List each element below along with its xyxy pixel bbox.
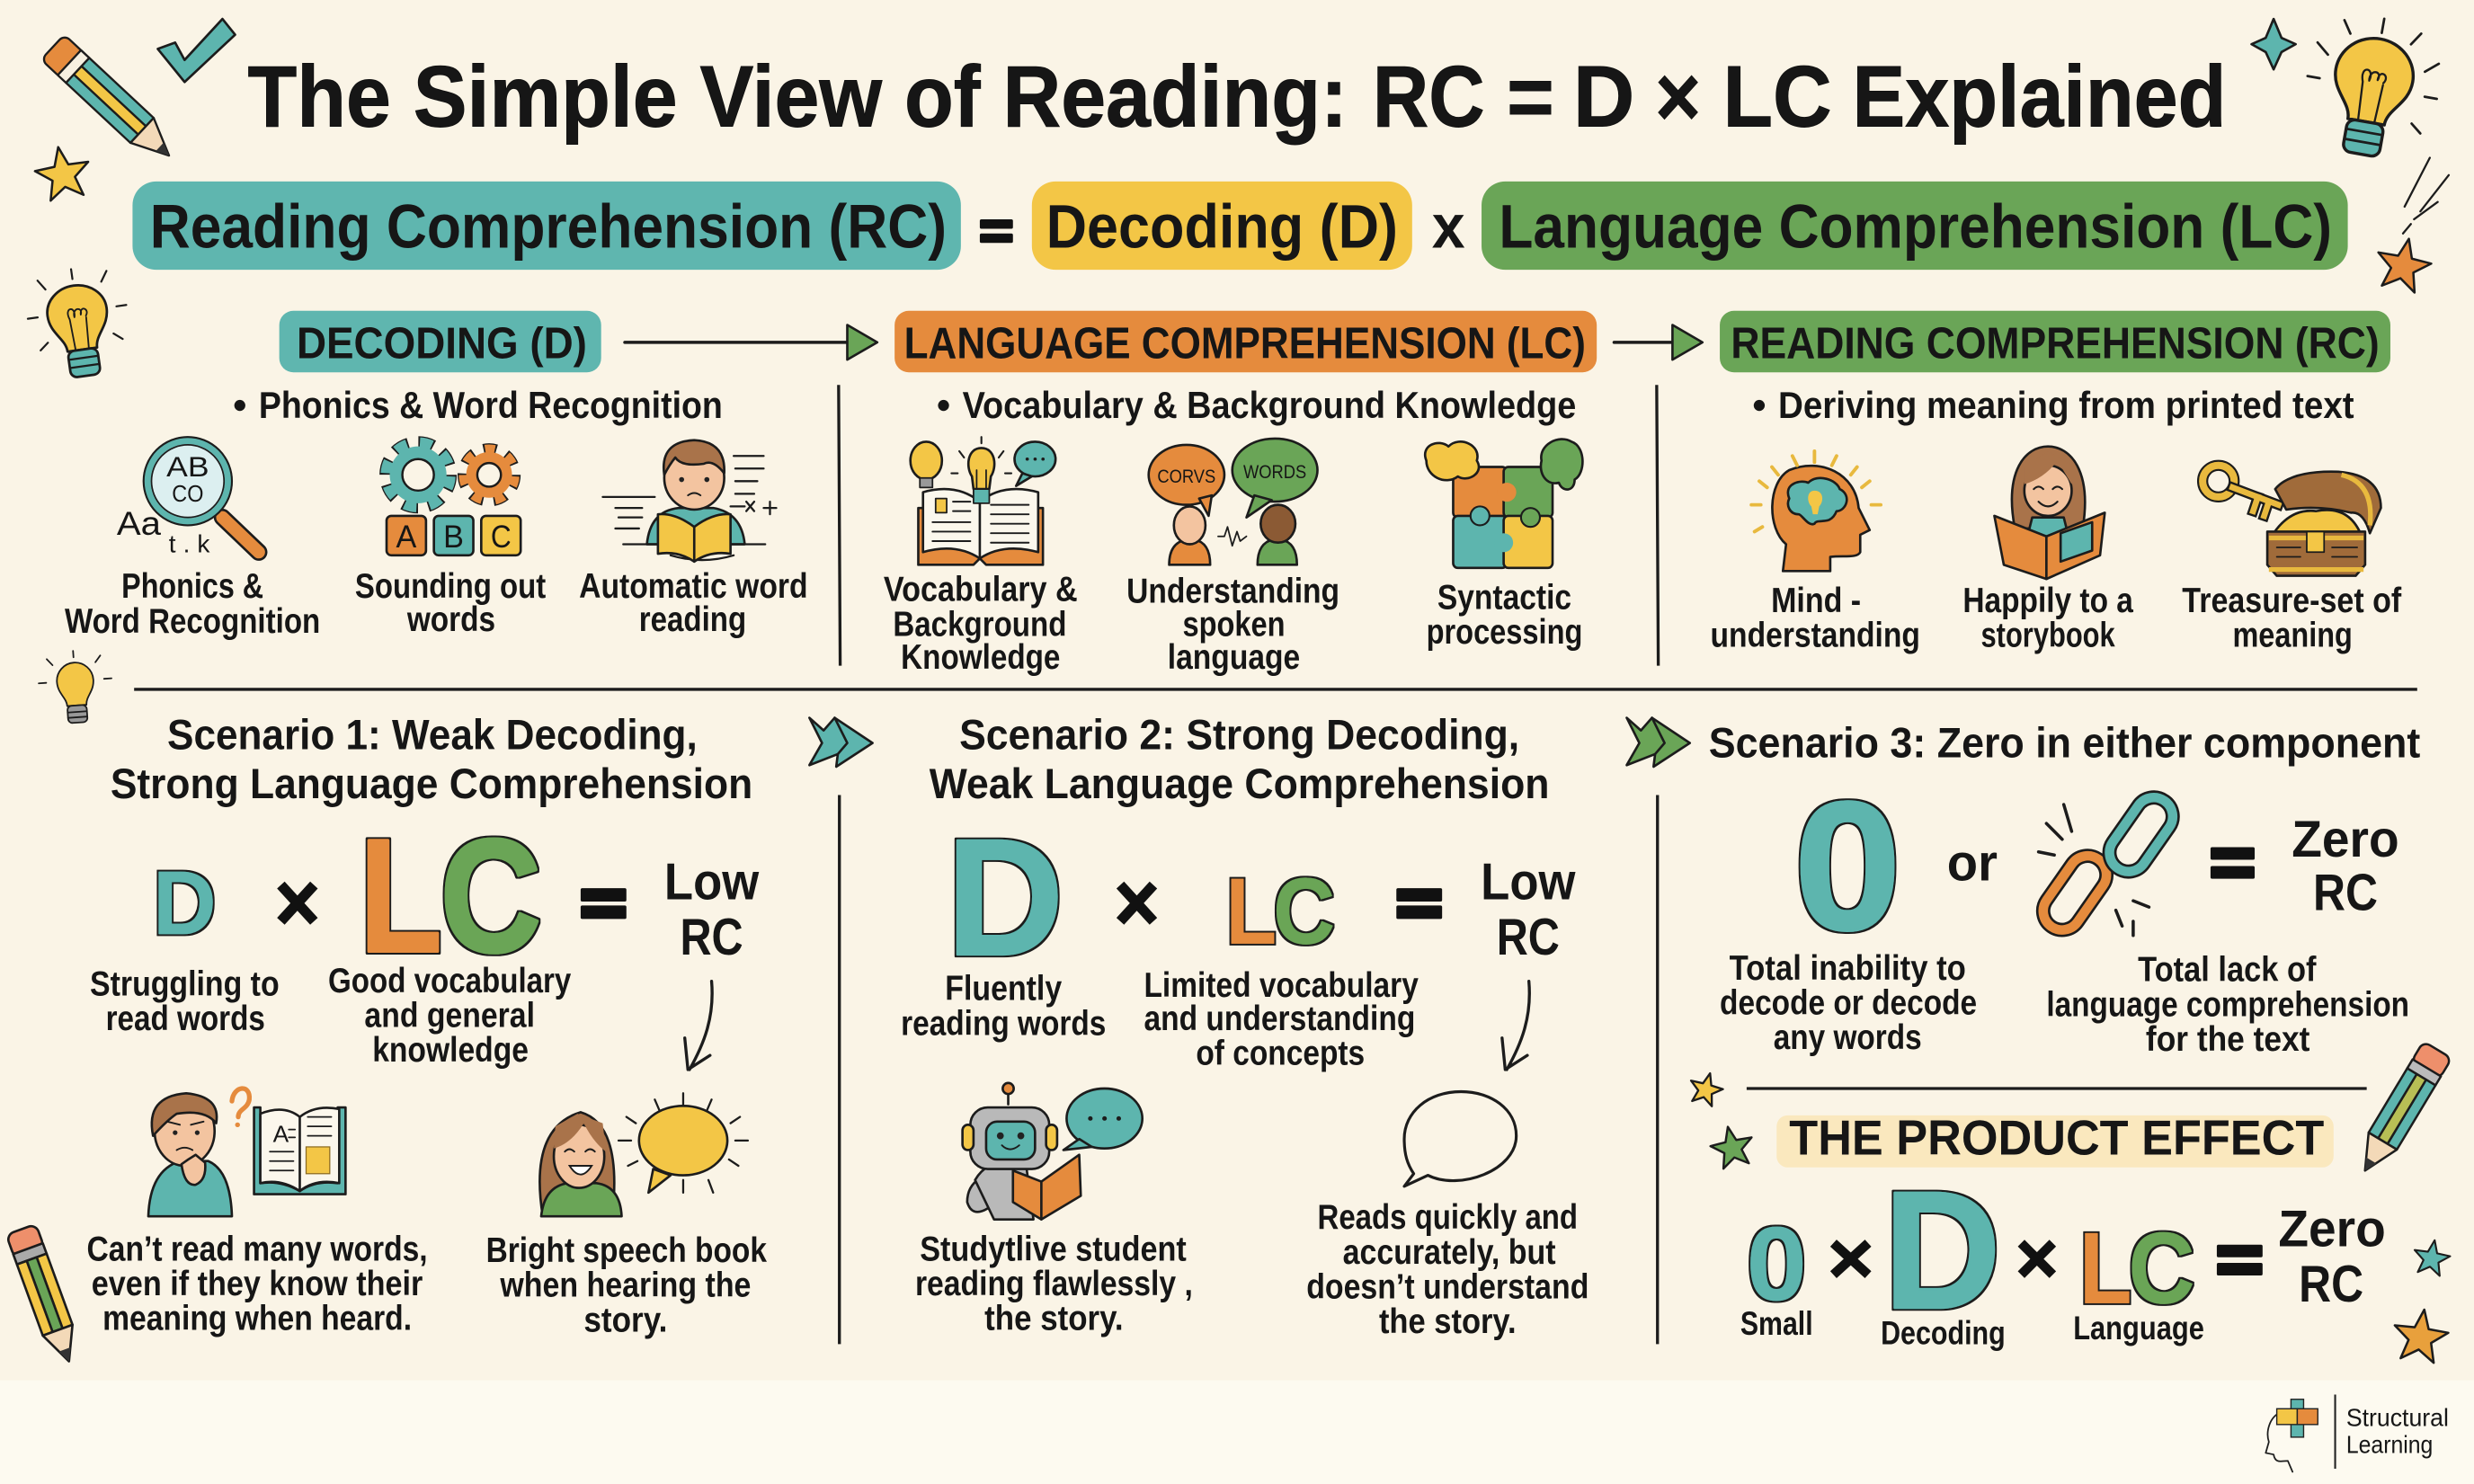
- caption: bright speech book: when hearing the: [499, 1266, 751, 1305]
- icon: two people conversation: WORDS: [1243, 462, 1306, 483]
- caption: syntactic processing: Syntactic: [1437, 578, 1571, 617]
- caption: studytlive student: the story.: [984, 1300, 1124, 1338]
- scenario 1 equation: Low: [664, 853, 760, 911]
- product effect equation: 0: [1747, 1205, 1807, 1322]
- caption: limited vocabulary: [1144, 966, 1419, 1073]
- icon: yellow star: [31, 142, 93, 202]
- scenario 2 equation: RC: [1497, 909, 1560, 966]
- arrow: decoding to language comprehension: [625, 325, 877, 360]
- icon: orange star: [2372, 233, 2435, 295]
- scenario 1 heading: Strong Language Comprehension: [111, 760, 752, 808]
- product effect heading: THE PRODUCT EFFECT: [1789, 1111, 2324, 1166]
- title: LC: [1723, 49, 1832, 145]
- caption: reads quickly: the story.: [1379, 1302, 1517, 1341]
- icon: small green star: [1707, 1123, 1757, 1170]
- caption: phonics: Phonics &: [121, 567, 263, 606]
- caption: fluently reading: Fluently: [945, 970, 1063, 1009]
- icon: light bulb top right: [2296, 7, 2449, 165]
- icon: happy girl and speech sun: [539, 1093, 748, 1216]
- icon: magnifier with letters: AB: [166, 450, 209, 483]
- caption: spoken language: Understanding: [1126, 572, 1339, 610]
- icon: magnifier with letters: Aa: [117, 505, 162, 542]
- scenario 2 heading: Scenario 2: Strong Decoding,: [959, 712, 1519, 760]
- caption: reads quickly: doesn’t understand: [1306, 1267, 1589, 1306]
- caption: bright speech book: [486, 1231, 767, 1339]
- scenario 2 heading: Weak Language Comprehension: [930, 760, 1550, 808]
- icon: robot reading: [963, 1083, 1143, 1220]
- icon: pencil top left: [41, 35, 181, 168]
- scenario 2 equation: C: [1273, 859, 1335, 964]
- icon: magnifier with letters: CO: [172, 480, 203, 507]
- logo: structural learning: [2265, 1394, 2449, 1471]
- icon: gears and ABC blocks: A: [396, 520, 417, 555]
- caption: total inability: Total inability to: [1730, 949, 1966, 988]
- icon: puzzle with clouds: [1425, 440, 1582, 568]
- icon: key and treasure chest: [2203, 466, 2381, 576]
- product effect equation: RC: [2299, 1256, 2363, 1313]
- caption: good vocabulary: and general: [364, 997, 535, 1035]
- caption: sounding out: words: [406, 600, 495, 639]
- scenario 3 or: or: [1947, 834, 1998, 892]
- scenario 3 equals zero RC: RC: [2313, 865, 2378, 922]
- scenario 2 equation: L: [1226, 859, 1277, 964]
- title: ×: [1655, 49, 1701, 145]
- icon: small yellow star: [1686, 1069, 1726, 1108]
- caption: total inability: any words: [1774, 1018, 1922, 1057]
- icon: empty speech bubble: [1404, 1092, 1517, 1186]
- scenario 1 heading: Scenario 1: Weak Decoding,: [167, 712, 698, 760]
- title: [248, 49, 2226, 145]
- icon: gears and ABC blocks: [387, 443, 521, 555]
- scenario 2 equation: D: [947, 805, 1063, 991]
- label: language: Language: [2073, 1310, 2204, 1346]
- caption: mind understanding: understanding: [1711, 617, 1920, 655]
- caption: treasure of meaning: [2182, 582, 2401, 655]
- icon: small bulb: [37, 648, 114, 725]
- icon: teal sparkle: [2252, 19, 2296, 69]
- caption: happily to a storybook: Happily to a: [1962, 582, 2133, 620]
- caption: total lack: [2046, 951, 2409, 1059]
- product effect equation: Zero: [2278, 1201, 2386, 1258]
- product effect equation: D: [1884, 1158, 2000, 1344]
- header: decoding: DECODING (D): [297, 319, 587, 368]
- header: reading comprehension: READING COMPREHENSION (RC): [1731, 319, 2380, 368]
- caption: happily to a storybook: [1962, 582, 2133, 655]
- caption: total lack: language comprehension: [2046, 985, 2409, 1024]
- caption: struggling: [90, 964, 280, 1038]
- scenario 3 equals zero RC: [2211, 811, 2399, 922]
- caption: vocabulary: Knowledge: [901, 638, 1060, 677]
- caption: automatic word reading: reading: [639, 600, 746, 639]
- caption: reads quickly: [1306, 1198, 1589, 1341]
- title: Explained: [1852, 49, 2226, 145]
- icon: head with brain: [1751, 451, 1881, 571]
- label: small: Small: [1740, 1305, 1813, 1342]
- icon: confused student with book: A: [273, 1121, 289, 1148]
- caption: cannot read many words: meaning when heard.: [102, 1300, 412, 1338]
- scenario 1 equation: C: [441, 805, 541, 985]
- caption: total inability: [1720, 949, 1977, 1057]
- arrow: language comprehension to reading comprehension: [1614, 325, 1703, 360]
- caption: phonics: Word Recognition: [65, 602, 320, 641]
- scenario 3 heading: Scenario 3: Zero in either component: [1709, 719, 2421, 767]
- formula: equals sign: [980, 219, 1013, 243]
- formula: times sign: x: [1432, 192, 1465, 262]
- icon: small teal star: [2411, 1237, 2452, 1277]
- icon: motion lines: [2403, 158, 2449, 234]
- caption: mind understanding: [1711, 582, 1920, 655]
- scenario 3 equals zero RC: Zero: [2292, 811, 2399, 868]
- caption: syntactic processing: [1427, 578, 1582, 652]
- scenario 2 equation: Low: [1481, 853, 1576, 911]
- product effect equation: [1747, 1158, 2386, 1344]
- scenario 1 heading: [111, 712, 752, 808]
- caption: reads quickly: accurately, but: [1343, 1233, 1556, 1272]
- caption: sounding out: [355, 567, 546, 639]
- caption: fluently reading: reading words: [901, 1004, 1106, 1043]
- icon: happy girl with book: [1994, 447, 2105, 579]
- icon: open book with ideas: [911, 437, 1055, 564]
- caption: limited vocabulary: Limited vocabulary: [1144, 966, 1419, 1005]
- icon: magnifier with letters: t.k: [169, 529, 210, 557]
- scenario 1 equation: D: [153, 853, 216, 954]
- caption: sounding out: Sounding out: [355, 567, 546, 606]
- caption: bright speech book: story.: [583, 1301, 667, 1339]
- caption: struggling: Struggling to: [90, 964, 280, 1003]
- caption: studytlive student: [915, 1230, 1193, 1338]
- formula: reading comprehension pill: Reading Comprehension (RC): [150, 192, 947, 262]
- icon: magnifier with letters: [117, 437, 259, 557]
- caption: reads quickly: Reads quickly and: [1318, 1198, 1578, 1237]
- scenario 2 equation: [947, 805, 1576, 991]
- scenario 1 equation: L: [360, 805, 441, 985]
- logo: structural learning: Structural: [2346, 1404, 2449, 1432]
- title: RC: [1373, 49, 1485, 145]
- caption: total lack: Total lack of: [2138, 951, 2317, 990]
- caption: limited vocabulary: of concepts: [1196, 1035, 1365, 1073]
- bullet: language comprehension: Vocabulary & Background Knowledge: [963, 384, 1576, 426]
- caption: vocabulary: [884, 571, 1078, 677]
- bullet: reading comprehension: Deriving meaning from printed text: [1778, 384, 2354, 426]
- arrow: teal chevrons: [809, 718, 873, 767]
- formula: decoding pill: Decoding (D): [1046, 192, 1398, 262]
- caption: automatic word reading: [579, 567, 808, 639]
- caption: vocabulary: Vocabulary &: [884, 571, 1078, 609]
- caption: happily to a storybook: storybook: [1981, 617, 2115, 655]
- title: The Simple View of Reading:: [248, 49, 1348, 145]
- icon: boy reading quickly: [602, 440, 777, 562]
- arrow: scenario 1 result: [685, 982, 712, 1070]
- title: =: [1507, 49, 1554, 145]
- caption: mind understanding: Mind -: [1771, 582, 1861, 620]
- icon: check mark: [158, 19, 236, 82]
- title: D: [1573, 49, 1634, 145]
- product effect equation: L: [2079, 1212, 2131, 1325]
- icon: bulb left: [22, 262, 135, 383]
- icon: gears and ABC blocks: C: [491, 520, 512, 555]
- formula: language comprehension pill: Language Comprehension (LC): [1499, 192, 2332, 262]
- scenario 3 zero: 0: [1794, 765, 1901, 969]
- scenario 2 heading: [930, 712, 1550, 808]
- icon: two people conversation: CORVS: [1157, 467, 1215, 487]
- caption: good vocabulary: Good vocabulary: [328, 962, 572, 1000]
- caption: struggling: read words: [106, 1000, 265, 1038]
- header: language comprehension: LANGUAGE COMPREHENSION (LC): [904, 319, 1586, 368]
- icon: breaking chain link: [2036, 790, 2180, 937]
- logo: structural learning: Learning: [2346, 1430, 2433, 1458]
- caption: total inability: decode or decode: [1720, 984, 1977, 1023]
- scenario 1 equation: RC: [680, 909, 743, 966]
- caption: studytlive student: reading flawlessly ,: [915, 1265, 1193, 1303]
- caption: limited vocabulary: and understanding: [1144, 1000, 1415, 1038]
- icon: gears and ABC blocks: B: [443, 520, 464, 555]
- caption: phonics: [65, 567, 320, 641]
- caption: fluently reading: [901, 970, 1106, 1043]
- caption: bright speech book: Bright speech book: [486, 1231, 767, 1270]
- scenario 1 equation: [153, 805, 760, 985]
- caption: spoken language: spoken: [1182, 605, 1286, 644]
- caption: cannot read many words: Can’t read many words,: [87, 1230, 428, 1268]
- icon: pencil right: [2351, 1042, 2452, 1179]
- product effect equation: C: [2129, 1212, 2194, 1325]
- caption: good vocabulary: [328, 962, 572, 1070]
- caption: vocabulary: Background: [893, 605, 1066, 644]
- caption: total lack: for the text: [2146, 1020, 2310, 1059]
- caption: studytlive student: Studytlive student: [920, 1230, 1187, 1268]
- caption: cannot read many words: [87, 1230, 428, 1338]
- caption: automatic word reading: Automatic word: [579, 567, 808, 606]
- label: decoding: Decoding: [1881, 1314, 2006, 1351]
- caption: spoken language: language: [1168, 638, 1300, 677]
- caption: treasure of meaning: meaning: [2232, 617, 2353, 655]
- arrow: scenario 2 result: [1502, 982, 1529, 1070]
- caption: good vocabulary: knowledge: [372, 1031, 529, 1070]
- arrow: green chevrons: [1627, 718, 1690, 767]
- icon: confused student with book: [148, 1089, 345, 1216]
- icon: orange star bottom: [2390, 1306, 2451, 1364]
- caption: cannot read many words: even if they know their: [92, 1265, 423, 1303]
- caption: treasure of meaning: Treasure-set of: [2182, 582, 2401, 620]
- caption: spoken language: [1126, 572, 1339, 677]
- caption: syntactic processing: processing: [1427, 613, 1582, 652]
- icon: pencil bottom left: [6, 1224, 84, 1367]
- bullet: decoding: Phonics & Word Recognition: [259, 384, 723, 426]
- icon: two people conversation: [1149, 439, 1318, 564]
